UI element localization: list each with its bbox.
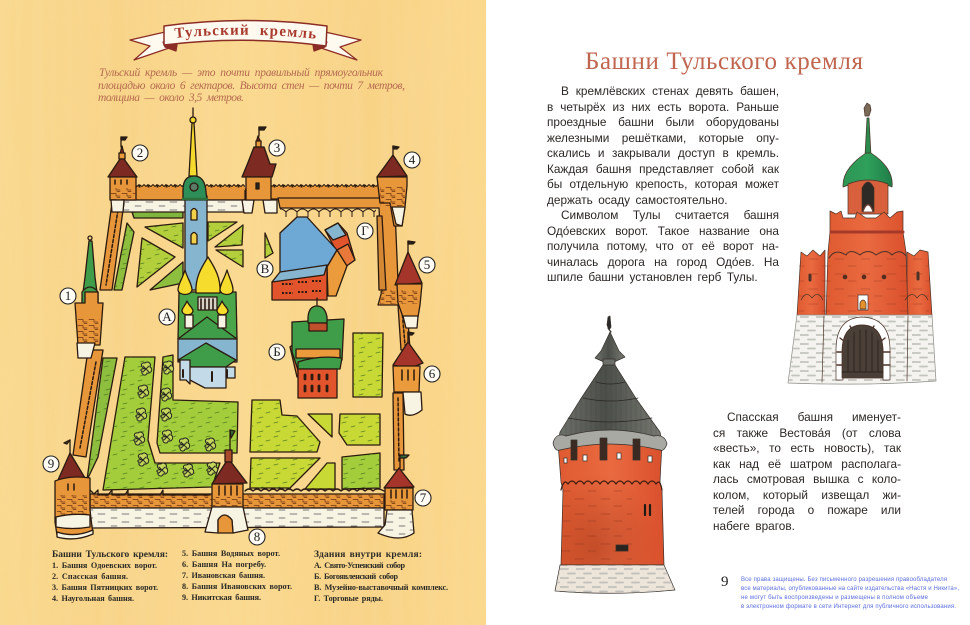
tower 1	[75, 236, 103, 358]
copyright notice: в электронном формате в сети Интернет для публичного использования.	[741, 604, 956, 610]
main tower	[826, 211, 908, 316]
text block: nine towers: чиналась дорога на город Одо́ев. На	[547, 254, 779, 268]
brim	[553, 430, 667, 450]
legend column: buildings: Б. Богоявленский собор	[314, 572, 398, 581]
tower 3	[242, 127, 276, 200]
marker labels: 4	[409, 152, 416, 167]
ribbon heading	[129, 20, 362, 61]
marker labels: 9	[48, 456, 54, 471]
text block: nine towers: Каждая башня представляет собой как	[547, 162, 779, 176]
text block: Spasskaya tower: как над её шатром располага-	[713, 456, 901, 470]
tower 7	[378, 455, 414, 538]
building В	[272, 217, 355, 300]
intro text: площадью около 6 гектаров. Высота стен — почти 7 метров,	[98, 80, 405, 92]
legend column: buildings: В. Музейно-выставочный комплекс.	[314, 583, 448, 592]
text block: nine towers: шпиле башни установлен герб Тулы.	[547, 270, 758, 284]
marker labels: 1	[65, 288, 71, 303]
copyright notice	[741, 577, 959, 610]
legend column: towers 1-4: 4. Наугольная башня.	[52, 594, 134, 603]
tower 4	[377, 146, 407, 226]
legend column: towers 5-9: 5. Башня Водяных ворот.	[182, 549, 280, 558]
inner wall band	[278, 198, 399, 305]
text block: nine towers: получила потому, что от её ворот на-	[547, 239, 779, 253]
text block: nine towers: В кремлёвских стенах девять башен,	[561, 84, 779, 98]
text block: nine towers: проездные башни были оборудованы	[547, 115, 779, 129]
tower 6	[393, 332, 423, 415]
copyright notice: не могут быть воспроизведены и размещены в полном объеме	[741, 595, 929, 601]
right wall	[393, 305, 410, 470]
finial bird	[607, 316, 611, 330]
legend column: buildings: Здания внутри кремля:	[314, 550, 422, 560]
marker labels: 5	[424, 257, 430, 272]
merlons and loopholes	[571, 438, 640, 460]
main cone	[558, 365, 662, 443]
legend column: towers 5-9: 9. Никитская башня.	[182, 593, 261, 602]
text block: nine towers: в четырёх из них есть ворота. Раньше	[547, 100, 779, 114]
lantern	[848, 180, 888, 214]
top wall right of gate	[242, 183, 380, 213]
legend column: towers 1-4: Башни Тульского кремля:	[52, 550, 168, 560]
text block: nine towers	[547, 84, 779, 284]
text block: Spasskaya tower: телей города о пожаре или	[713, 503, 901, 517]
legend column: towers 5-9	[182, 549, 292, 602]
legend column: towers 1-4	[52, 550, 168, 603]
icon niche	[858, 295, 868, 310]
legend column: towers 1-4: 3. Башня Пятницких ворот.	[52, 583, 158, 592]
text block: nine towers: бы отдельную крепость, которая может	[547, 177, 779, 191]
text block: nine towers: Одо́евских ворот. Такое название она	[547, 224, 779, 238]
tower 8	[205, 430, 248, 533]
copyright notice: Все права защищены. Без письменного разрешения правообладателя	[741, 577, 947, 583]
marker labels: 7	[420, 490, 427, 505]
text block: nine towers: скались и закрывали доступ в кремль.	[547, 146, 779, 160]
top cone	[595, 332, 625, 362]
legend column: buildings: Г. Торговые ряды.	[314, 594, 383, 603]
legend	[52, 549, 448, 603]
marker labels: Г	[361, 223, 369, 238]
text block: Spasskaya tower: «весть», то есть новость), так	[713, 441, 901, 455]
bell tower	[183, 108, 207, 290]
legend column: buildings: А. Свято-Успенский собор	[314, 561, 405, 570]
white base	[555, 565, 675, 593]
tower 5	[395, 241, 422, 328]
marker labels: 3	[274, 140, 280, 155]
page number: 9	[721, 574, 728, 590]
legend column: towers 1-4: 1. Башня Одоевских ворот.	[52, 561, 157, 570]
intro text: толщина — около 3,5 метров.	[98, 92, 244, 104]
finial	[864, 103, 871, 116]
ribbon title: Тульский кремль	[174, 24, 316, 40]
white stone base	[788, 315, 936, 384]
legend column: towers 1-4: 2. Спасская башня.	[52, 572, 128, 581]
legend column: towers 5-9: 8. Башня Ивановских ворот.	[182, 582, 292, 591]
ribbon body	[164, 20, 327, 46]
green dome	[843, 153, 892, 187]
intro text: Тульский кремль — это почти правильный прямоугольник	[99, 66, 384, 79]
marker labels: А	[162, 309, 172, 324]
top wall left of gate	[122, 183, 245, 212]
wall wings	[797, 250, 825, 316]
bottom wall	[90, 489, 384, 528]
text block: nine towers: держать осаду самостоятельно.	[547, 192, 728, 206]
left page background	[0, 0, 486, 625]
left wall	[73, 203, 124, 457]
gate arch	[836, 317, 890, 380]
marker labels	[48, 140, 436, 544]
marker labels: 2	[137, 145, 143, 160]
gate door	[842, 325, 883, 378]
intro text	[98, 66, 405, 104]
lawn dashes	[87, 222, 383, 490]
text block: Spasskaya tower: набеге врагов.	[713, 518, 795, 532]
text block: Spasskaya tower: Спасская башня именует-	[727, 410, 901, 424]
marker labels: 6	[429, 366, 436, 381]
marker labels: Б	[273, 344, 281, 359]
marker labels: В	[261, 261, 270, 276]
legend column: buildings	[314, 550, 448, 603]
tower 2	[108, 137, 137, 212]
legend column: towers 5-9: 6. Башня На погребу.	[182, 560, 266, 569]
page title: Башни Тульского кремля	[585, 48, 864, 75]
illustration: Odoevsky gate tower	[788, 103, 936, 384]
trees	[134, 361, 218, 477]
text block: nine towers: железными решётками, которые опу-	[547, 130, 779, 144]
text block: Spasskaya tower: колом, который извещал жи-	[713, 488, 901, 502]
copyright notice: все материалы, опубликованные на сайте издательства «Настя и Никита»,	[741, 585, 959, 592]
lawns	[87, 211, 383, 490]
legend column: towers 5-9: 7. Ивановская башня.	[182, 571, 265, 580]
marker labels: 8	[254, 529, 260, 544]
kremlin map	[43, 108, 440, 545]
text block: Spasskaya tower	[713, 410, 901, 532]
number markers	[43, 140, 440, 545]
text block: nine towers: Символом Тулы считается башня	[561, 208, 779, 222]
text block: Spasskaya tower: ся также Вестова́я (от слова	[713, 426, 901, 440]
cathedral А	[178, 257, 237, 388]
red body	[558, 443, 664, 565]
ribbon tails	[130, 32, 361, 60]
text block: Spasskaya tower: лась смотровая вышка с коло-	[713, 472, 901, 486]
illustration: Spasskaya tower	[553, 316, 675, 593]
tower 9	[55, 440, 93, 539]
building Б	[290, 298, 344, 398]
yellow domes	[178, 257, 233, 315]
